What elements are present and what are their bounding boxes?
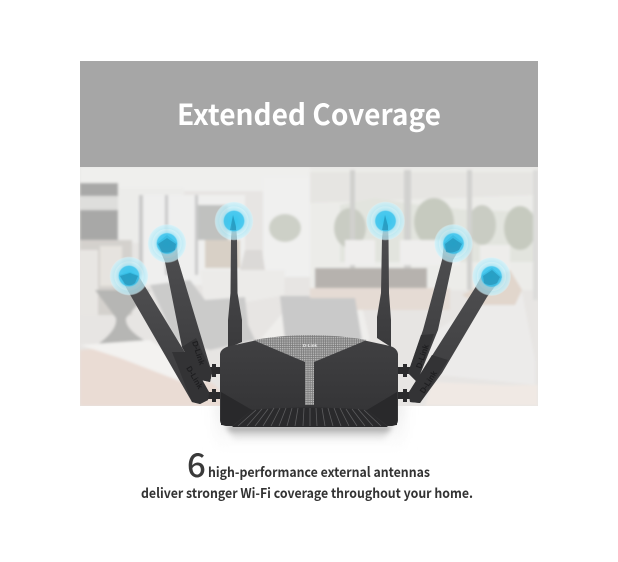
big number: 6 — [187, 439, 206, 487]
antenna 1 — [119, 272, 209, 404]
antenna 3 — [228, 215, 242, 348]
antenna tips seen through glow — [120, 215, 500, 285]
wifi glow rings — [110, 202, 511, 296]
header band — [80, 61, 538, 167]
antenna 5 — [408, 235, 463, 382]
mesh top — [253, 335, 367, 405]
router — [220, 335, 398, 427]
background photo: living room — [80, 167, 538, 406]
title: Extended Coverage — [177, 92, 441, 134]
antenna brand labels: D-Link — [184, 364, 205, 391]
caption line 2: deliver stronger Wi-Fi coverage throughout your home. — [141, 482, 473, 502]
antenna brand labels: D-Link — [190, 340, 207, 367]
antenna 4 — [377, 215, 391, 347]
router body — [220, 336, 398, 426]
router logo: D-Link — [303, 343, 317, 348]
antenna shading — [172, 334, 448, 404]
antenna brand labels: D-Link — [414, 343, 431, 370]
antenna connectors — [206, 364, 413, 402]
front vent — [232, 408, 388, 427]
antenna 2 — [157, 235, 212, 382]
caption line 1: high-performance external antennas — [208, 461, 430, 481]
caption — [141, 439, 473, 502]
antennas — [119, 215, 502, 404]
reflection below router — [216, 406, 404, 441]
antenna brand labels — [184, 340, 439, 395]
corner facets — [221, 392, 252, 426]
antenna 6 — [409, 268, 502, 403]
antenna brand labels: D-Link — [418, 369, 439, 395]
